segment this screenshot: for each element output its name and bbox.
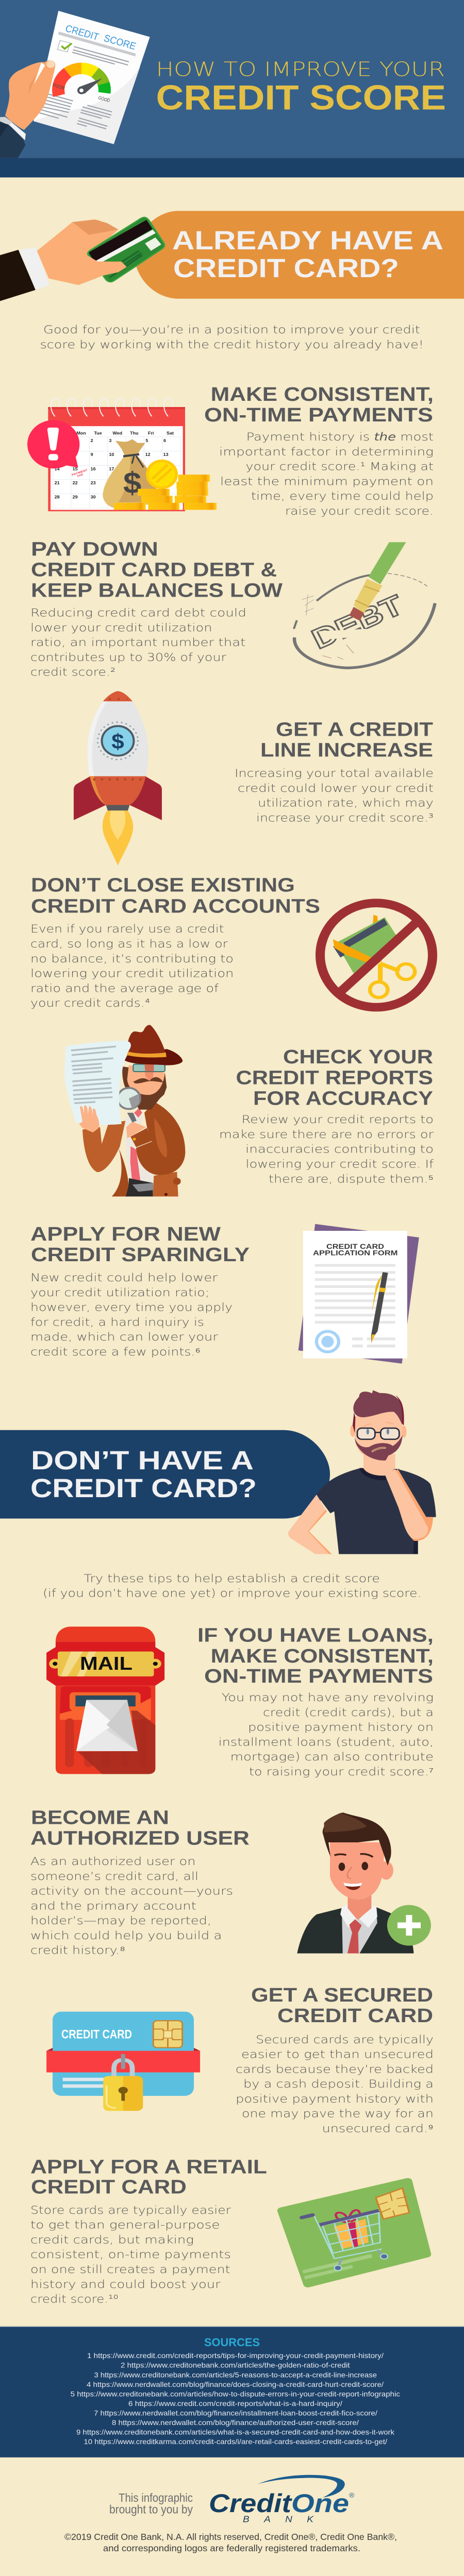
body text: lower your credit utilization (30, 622, 212, 634)
icon: rocket dollar porthole (98, 722, 138, 759)
intro text: no card tips: (if you don’t have one yet) or improve your existing score. (43, 1587, 422, 1600)
icon: calendar with money bag: 5 (145, 438, 148, 443)
body text (219, 1114, 434, 1185)
title (156, 58, 446, 117)
heading: GET A CREDIT (276, 719, 433, 740)
body text: unsecured card.⁹ (322, 2123, 434, 2135)
logo: Credit One Bank (209, 2475, 354, 2524)
icon: calendar with money bag: Tue (94, 431, 102, 435)
body text: which could help you build a (30, 1930, 222, 1942)
body text: mortgage) can also contribute (230, 1751, 434, 1764)
body text: credit score a few points.⁶ (30, 1346, 201, 1359)
heading: ON-TIME PAYMENTS (204, 404, 433, 426)
icon: hand holding green card (0, 217, 164, 301)
icon: calendar with money bag: 12 (145, 452, 151, 457)
banner heading (30, 1446, 257, 1503)
body text: contributes up to 30% of your (30, 652, 226, 664)
body text: there are, dispute them.⁵ (269, 1173, 434, 1185)
heading: PAY DOWN (31, 538, 158, 560)
illustration: hand holding credit score report: SCORE (102, 33, 137, 52)
icon: calendar with money bag: PAYMENT (72, 469, 89, 477)
heading: IF YOU HAVE LOANS, (197, 1624, 434, 1646)
money bag: $ (123, 466, 141, 499)
banner heading (172, 226, 443, 283)
icon: green store card with cart (281, 2181, 427, 2284)
brought-to-you-by text: brought to you by (109, 2503, 193, 2516)
intro text: no card tips: Try these tips to help establish a credit score (84, 1573, 380, 1585)
card label: CREDIT CARD (61, 2027, 132, 2041)
intro text: score by working with the credit history you already have! (40, 339, 424, 351)
body text: New credit could help lower (30, 1272, 218, 1284)
body text: make sure there are no errors or (219, 1129, 434, 1141)
copyright: and corresponding logos are federally registered trademarks. (103, 2543, 360, 2553)
logo: Credit One Bank: Credit (209, 2489, 293, 2518)
heading (30, 1223, 250, 1266)
body text: raise your credit score. (285, 505, 434, 518)
alert bubble (27, 420, 79, 468)
heading: CHECK YOUR (283, 1046, 433, 1068)
coin (146, 460, 178, 489)
body text: lowering your credit score. If (246, 1158, 434, 1171)
money bag (103, 439, 156, 508)
body text: consistent, on-time payments (30, 2249, 231, 2261)
icon: calendar with money bag: 22 (73, 480, 78, 485)
body text: Reducing credit card debt could (30, 607, 246, 619)
title: CREDIT SCORE (156, 78, 446, 117)
sources list: 10 https://www.creditkarma.com/credit-cards/i/are-retail-cards-easiest-credit-cards-to-get/ (84, 2438, 387, 2446)
icon: debt stamp being erased: DEBT (307, 589, 408, 655)
heading (197, 1624, 434, 1687)
intro text: Good for you—you’re in a position to improve your credit (43, 324, 420, 336)
gauge: POOR (52, 83, 65, 91)
brought-to-you-by text: This infographic (119, 2492, 193, 2505)
icon: calendar with money bag: Sat (167, 431, 174, 435)
hand (5, 60, 55, 130)
illustration: hand holding credit score report (0, 11, 150, 158)
panel: credit line increase (74, 691, 434, 866)
body text: to get than general-purpose (30, 2219, 220, 2231)
body text: activity on the account—yours (30, 1885, 233, 1897)
body text: ratio and the average age of (30, 982, 219, 995)
icon: calendar with money bag: 17 (109, 466, 114, 471)
intro text (40, 324, 424, 351)
sources list: 9 https://www.creditonebank.com/articles/what-is-a-secured-credit-card-and-how-does-it-work (76, 2428, 395, 2436)
body text: your credit utilization ratio; (30, 1287, 209, 1299)
body text: Increasing your total available (235, 768, 434, 780)
brought-to-you-by text (109, 2492, 193, 2516)
icon: calendar with money bag: Wed (112, 431, 122, 435)
section banner: don't have a credit card (0, 1390, 436, 1554)
body text: ratio, an important number that (30, 637, 245, 649)
body text: inaccuracies contributing to (245, 1143, 434, 1156)
icon: calendar with money bag: 16 (91, 466, 96, 471)
heading (31, 874, 320, 917)
body text: Secured cards are typically (256, 2034, 434, 2046)
icon: rocket (74, 691, 162, 866)
heading: GET A SECURED (251, 1984, 433, 2006)
body text: holder’s—may be reported, (30, 1915, 211, 1927)
body text: You may not have any revolving (222, 1692, 434, 1704)
panel: loans on-time payments (46, 1624, 434, 1778)
panel: apply sparingly (30, 1223, 419, 1364)
intro text: no card tips (43, 1573, 422, 1600)
heading: ON-TIME PAYMENTS (204, 1665, 433, 1687)
sources panel (0, 2326, 464, 2458)
body text: someone’s credit card, all (30, 1871, 198, 1883)
heading: FOR ACCURACY (253, 1088, 433, 1109)
body text: lowering your credit utilization (30, 968, 234, 980)
body text: to raising your credit score.⁷ (249, 1766, 434, 1778)
logo: Credit One Bank: BANK (243, 2514, 314, 2524)
sources list: 8 https://www.nerdwallet.com/blog/finance/authorized-user-credit-score/ (112, 2419, 359, 2427)
icon: detective with report (64, 1025, 185, 1196)
header band (0, 0, 464, 177)
body text: made, which can lower your (30, 1331, 218, 1344)
body text: Review your credit reports to (242, 1114, 434, 1126)
heading (236, 1046, 433, 1109)
illustration: hand holding credit score report: CREDIT (64, 23, 100, 43)
icon: locked credit card (46, 2012, 200, 2111)
body text: card, so long as it has a low or (30, 938, 228, 951)
heading (204, 383, 434, 426)
body text: credit score.¹⁰ (30, 2293, 119, 2306)
icon: calendar with money bag: 29 (73, 495, 78, 500)
heading: APPLY FOR NEW (30, 1223, 221, 1245)
heading: LINE INCREASE (260, 739, 433, 761)
body text: credit history.⁸ (30, 1944, 125, 1957)
body text: Store cards are typically easier (30, 2205, 231, 2217)
banner heading: CREDIT CARD? (173, 254, 399, 283)
body text: installment loans (student, auto, (219, 1736, 434, 1749)
body text (30, 1272, 233, 1359)
body text: credit score.² (30, 666, 115, 679)
panel: don't close accounts (30, 874, 433, 1010)
icon: calendar with money bag: 3 (109, 438, 112, 443)
gauge (52, 63, 111, 104)
icon: application form: APPLICATION FORM (313, 1249, 397, 1257)
body text: credit could lower your credit (238, 783, 434, 795)
gauge: GOOD (97, 95, 110, 104)
body text: Even if you rarely use a credit (30, 923, 224, 936)
body text: credit (credit cards), but a (263, 1707, 434, 1719)
icon: application form: CREDIT CARD (326, 1243, 384, 1251)
body text: important factor in determining (219, 446, 434, 459)
sources list: 1 https://www.credit.com/credit-reports/tips-for-improving-your-credit-payment-history/ (87, 2352, 384, 2360)
icon: calendar with money bag: 10 (109, 452, 114, 457)
heading: AUTHORIZED USER (30, 1827, 250, 1849)
heading: MAKE CONSISTENT, (211, 383, 434, 405)
sources list: 4 https://www.nerdwallet.com/blog/finance/does-closing-a-credit-card-hurt-credit-score/ (87, 2380, 384, 2388)
icon: calendar with money bag: 14 (55, 466, 60, 471)
icon: calendar with money bag: 9 (91, 452, 93, 457)
sources list: 2 https://www.creditonebank.com/articles/the-golden-ratio-of-credit (121, 2361, 350, 2369)
icon: calendar with money bag: Thu (130, 431, 138, 435)
copyright: ©2019 Credit One Bank, N.A. All rights reserved, Credit One®, Credit One Bank®, (64, 2532, 397, 2542)
icon: calendar with money bag: Mon (76, 431, 86, 435)
body text (235, 768, 434, 824)
body text: As an authorized user on (30, 1856, 196, 1868)
logo: Credit One Bank: One (291, 2489, 349, 2518)
body text: cards because they’re backed (236, 2063, 434, 2076)
body text: however, every time you apply (30, 1301, 233, 1314)
icon: calendar with money bag: DUE (77, 473, 84, 478)
copyright (64, 2532, 397, 2553)
heading: KEEP BALANCES LOW (31, 580, 283, 601)
panel: pay down debt (30, 538, 435, 679)
panel: authorized user (30, 1807, 431, 1957)
sources list (71, 2352, 400, 2446)
icon: calendar with money bag: 28 (55, 495, 60, 500)
sources heading: SOURCES (204, 2336, 260, 2349)
mailbox label: MAIL (80, 1653, 132, 1674)
body text: on one still creates a payment (30, 2264, 230, 2276)
heading: CREDIT CARD ACCOUNTS (31, 895, 320, 917)
sources list: 7 https://www.nerdwallet.com/blog/finance/installment-loan-boost-credit-fico-score/ (94, 2409, 377, 2417)
body text (236, 2034, 434, 2135)
icon: debt stamp being erased (294, 542, 435, 668)
body text: utilization rate, which may (258, 797, 434, 809)
icon: calendar with money bag: 30 (91, 495, 96, 500)
body text: time, every time could help (251, 490, 434, 503)
heading: BECOME AN (31, 1807, 169, 1828)
panel: retail credit card (30, 2156, 427, 2306)
icon: calendar with money bag: Fri (148, 431, 154, 435)
body text: increase your credit score.³ (256, 812, 434, 824)
section banner: already have a credit card (0, 211, 464, 301)
icon: no cutting cards (320, 903, 433, 1007)
sources list: 3 https://www.creditonebank.com/articles/5-reasons-to-accept-a-credit-line-increase (94, 2371, 377, 2379)
sources list: 6 https://www.credit.com/credit-reports/what-is-a-hard-inquiry/ (128, 2399, 342, 2408)
body text: positive payment history on (248, 1721, 434, 1734)
panel: secured credit card (46, 1984, 434, 2135)
heading: CREDIT CARD (277, 2005, 433, 2027)
heading: CREDIT SPARINGLY (31, 1244, 250, 1266)
banner heading: DON’T HAVE A (31, 1446, 254, 1475)
icon: smiling man with plus badge (297, 1812, 431, 1953)
heading: DON’T CLOSE EXISTING (31, 874, 295, 896)
body text: your credit score.¹ Making at (246, 461, 434, 473)
body text (30, 1856, 233, 1957)
body text: your credit cards.⁴ (30, 997, 150, 1010)
body text (30, 607, 246, 679)
body text: positive payment history with (236, 2093, 434, 2106)
body text: and the primary account (30, 1900, 196, 1912)
heading (31, 538, 283, 601)
heading (251, 1984, 433, 2027)
sources list: 5 https://www.creditonebank.com/articles/how-to-dispute-errors-in-your-credit-report-infographic (71, 2390, 400, 2398)
heading: CREDIT REPORTS (236, 1067, 433, 1089)
icon: calendar with money bag: 23 (91, 480, 96, 485)
body text: for credit, a hard inquiry is (30, 1316, 204, 1329)
icon: thinking man with glasses (288, 1390, 436, 1554)
icon: calendar with money bag: 2 (91, 438, 93, 443)
banner heading: ALREADY HAVE A (172, 226, 443, 256)
heading (30, 1807, 250, 1849)
body text: easier to get than unsecured (241, 2048, 434, 2061)
heading (30, 2156, 267, 2198)
heading (260, 719, 433, 761)
body text: by a cash deposit. Building a (243, 2078, 434, 2091)
banner heading: CREDIT CARD? (30, 1474, 257, 1503)
panel: consistent on-time payments (27, 383, 434, 518)
body text (219, 1692, 434, 1778)
body text: no balance, it’s contributing to (30, 953, 234, 965)
icon: mailbox with envelope (46, 1626, 164, 1774)
icon: application form (299, 1224, 419, 1364)
icon: rocket dollar porthole: $ (111, 730, 124, 753)
body text: one may pave the way for an (242, 2108, 434, 2121)
body text (30, 923, 234, 1010)
icon: calendar with money bag: 6 (163, 438, 166, 443)
icon: calendar with money bag: 15 (73, 466, 78, 471)
body text: history and could boost your (30, 2278, 221, 2291)
heading: CREDIT CARD DEBT & (31, 559, 277, 581)
icon: calendar with money bag: 13 (163, 452, 169, 457)
body text (219, 431, 434, 518)
heading: APPLY FOR A RETAIL (30, 2156, 267, 2178)
body text (30, 2205, 231, 2306)
panel: check credit reports (64, 1025, 434, 1196)
icon: calendar with money bag (27, 399, 217, 511)
logo: Credit One Bank: ® (349, 2492, 354, 2499)
body text: credit cards, but making (30, 2234, 194, 2246)
heading: CREDIT CARD (31, 2176, 187, 2198)
icon: calendar with money bag: 21 (55, 480, 60, 485)
heading: MAKE CONSISTENT, (211, 1645, 434, 1667)
title: HOW TO IMPROVE YOUR (156, 58, 445, 81)
coin stacks (114, 474, 217, 510)
body text: least the minimum payment on (220, 476, 434, 488)
body text: Payment history is the most (246, 431, 434, 444)
